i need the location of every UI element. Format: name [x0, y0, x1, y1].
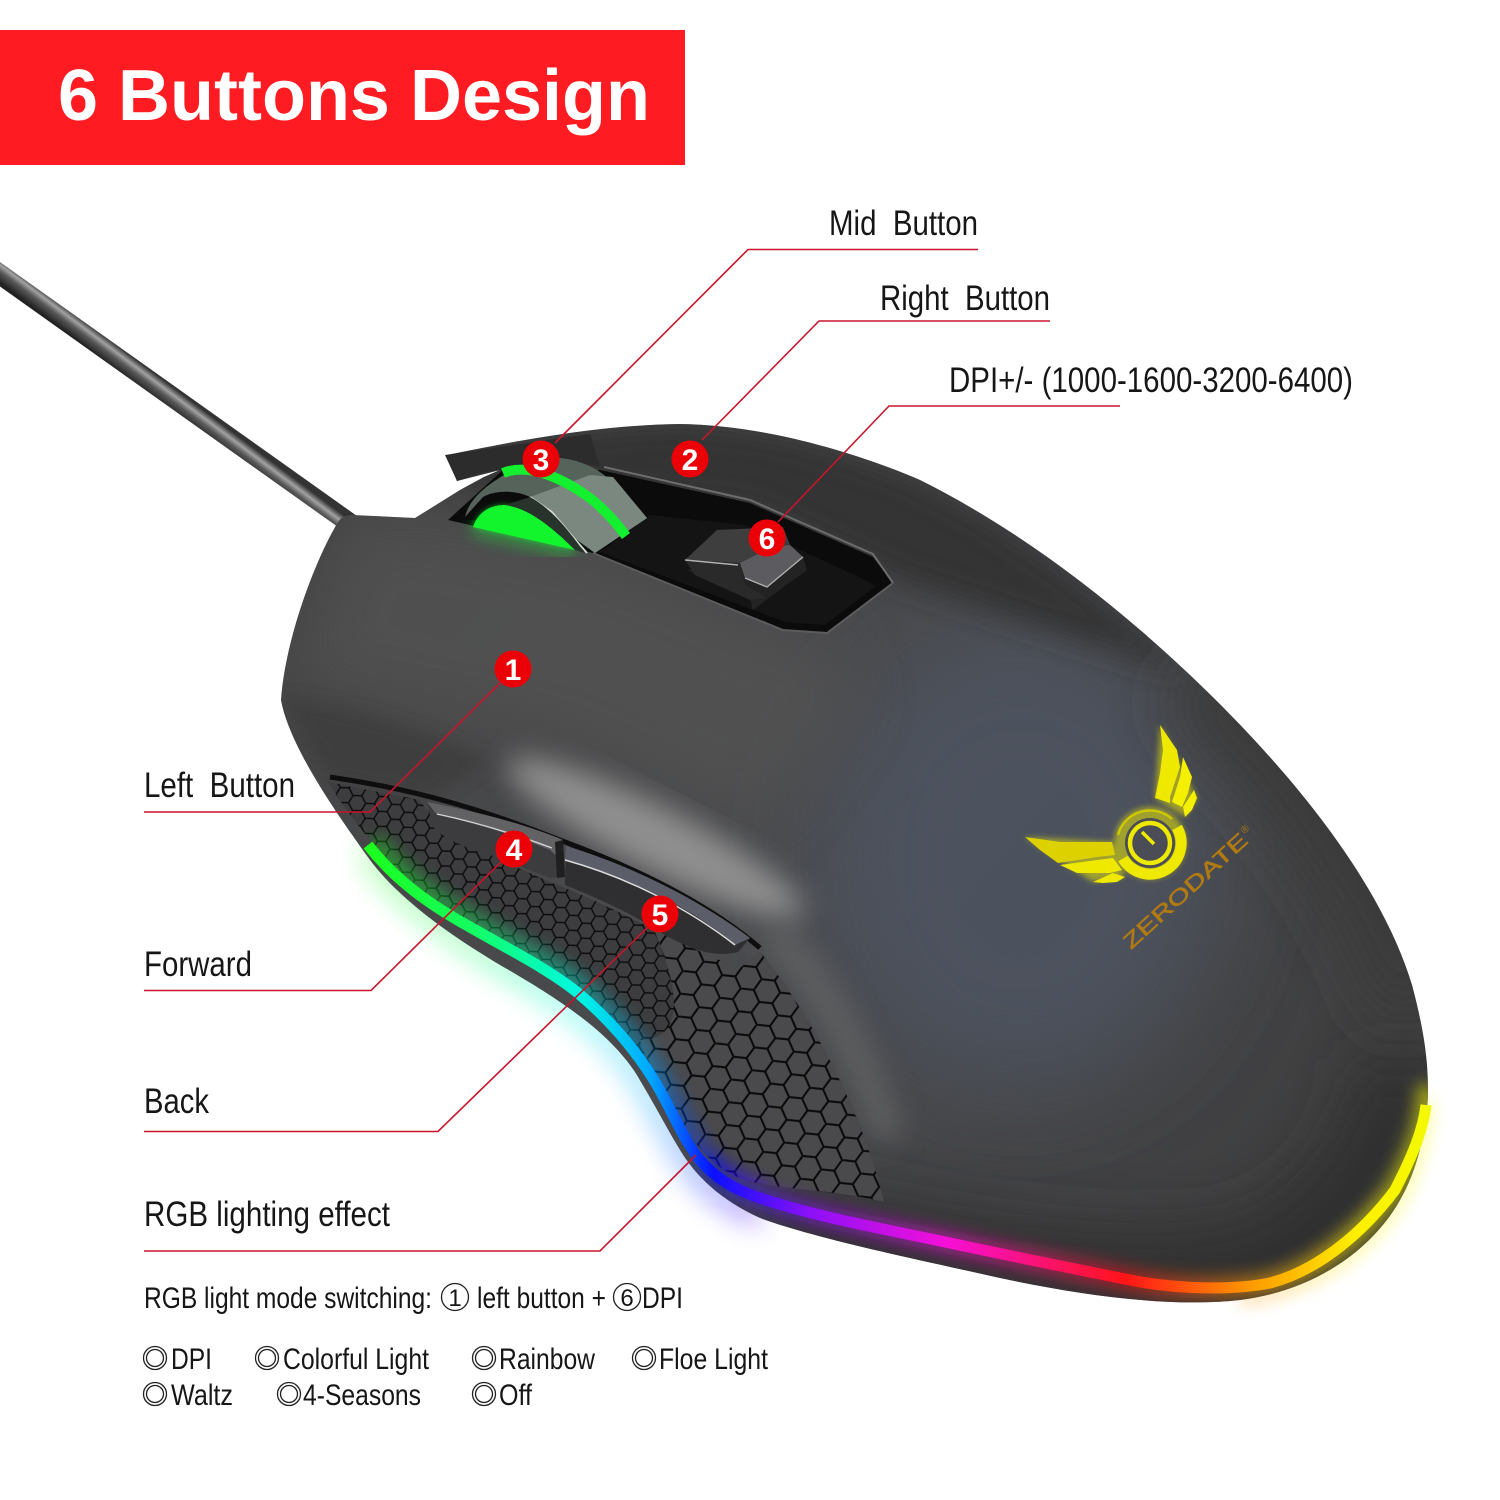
badge 3: [522, 440, 560, 478]
mode options: Waltz: [171, 1379, 233, 1412]
label: back: Back: [144, 1082, 209, 1121]
scroll wheel: [465, 458, 647, 553]
RGB inner glow: [700, 1085, 1428, 1288]
mode options: Floe Light: [659, 1343, 769, 1376]
callout line: mid button: [555, 250, 978, 443]
label: mid button: Mid Button: [829, 204, 978, 243]
top shell wing: [445, 434, 600, 481]
label: left button: Left Button: [144, 766, 295, 805]
mode options: Colorful Light: [283, 1343, 430, 1376]
mode options: [144, 1343, 769, 1412]
logo: brand name: ZERODATE: [1119, 829, 1253, 954]
large honeycomb: [640, 932, 884, 1202]
label: forward: Forward: [144, 945, 252, 984]
badge 4: 4: [506, 834, 523, 867]
cable: [0, 270, 358, 529]
RGB mode switching note: DPI: [642, 1282, 683, 1315]
side button back: [565, 846, 750, 954]
wheel tread: [465, 458, 647, 553]
grip top groove: [330, 777, 760, 948]
badge 6: [748, 520, 786, 556]
badge 2: [672, 440, 708, 478]
callout line: RGB: [144, 1155, 696, 1251]
RGB mode switching note: RGB light mode switching:: [144, 1282, 432, 1315]
wheel glow: [473, 527, 575, 550]
body highlight: [497, 744, 812, 930]
mouse body: [270, 410, 1440, 1310]
DPI button: [685, 527, 807, 610]
button slot: [448, 467, 893, 633]
body blue sheen: [820, 630, 1220, 1090]
logo: brand name: ®: [1239, 823, 1252, 836]
lower-left shoulder: [282, 706, 473, 792]
wheel inner dark: [505, 497, 585, 553]
callout line: right button: [702, 321, 1050, 440]
wheel right facet: [530, 475, 647, 553]
side grip: [332, 784, 884, 1202]
left button surface: [288, 504, 806, 782]
callout line: forward: [144, 862, 501, 990]
RGB mode switching note: 6: [620, 1285, 634, 1312]
top button shell: [447, 424, 1190, 675]
badge 3: 3: [533, 444, 549, 477]
RGB mode switching note: 1: [448, 1285, 462, 1312]
side button forward: [427, 802, 565, 878]
logo: brand name: [1119, 822, 1260, 954]
RGB mode switching note: [144, 1282, 683, 1315]
logo: wings: [1025, 725, 1197, 883]
title banner: [0, 30, 685, 165]
mode options: DPI: [171, 1343, 212, 1376]
callout line: left button: [144, 683, 500, 812]
wheel highlight: [530, 497, 587, 553]
green rim glow: [473, 505, 575, 550]
RGB mode switching note: left button +: [477, 1282, 606, 1315]
mode options: Off: [499, 1379, 533, 1412]
badge 6: 6: [759, 523, 775, 556]
badge 5: [642, 896, 678, 932]
RGB light strip: [368, 845, 1426, 1288]
right edge shade: [1190, 675, 1420, 1010]
badge 1: 1: [505, 654, 521, 687]
label: right button: Right Button: [880, 279, 1050, 318]
label: RGB lighting effect: RGB lighting effect: [144, 1195, 390, 1234]
mode options: 4-Seasons: [303, 1379, 421, 1412]
badge 4: [496, 830, 532, 868]
badge 2: 2: [682, 444, 698, 477]
RGB glow halo: yellow end: [1240, 1100, 1428, 1300]
label: DPI: DPI+/- (1000-1600-3200-6400): [949, 361, 1353, 400]
mode options: Rainbow: [499, 1343, 595, 1376]
badge 5: 5: [652, 899, 668, 932]
green rim: [473, 505, 575, 550]
bottom shade: [760, 1060, 1400, 1275]
strip glow on grip: [368, 845, 760, 1198]
RGB glow halo: left side: [368, 850, 760, 1218]
callout line: DPI: [778, 406, 1120, 522]
title banner: 6 Buttons Design: [58, 56, 650, 136]
green band: [503, 470, 626, 536]
callout line: back: [144, 927, 648, 1132]
grip rim sheen: [770, 930, 890, 1140]
badge 1: [494, 650, 532, 688]
